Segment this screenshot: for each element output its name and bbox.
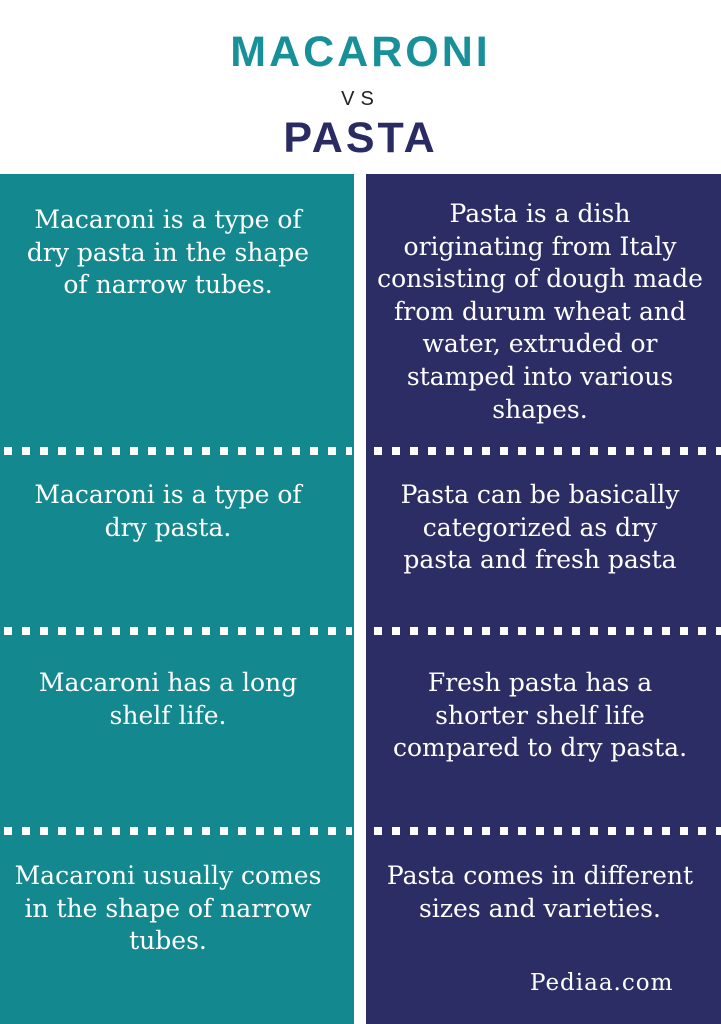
text: pasta shelf life: shorter shelf life: [435, 701, 645, 730]
text: macaroni definition: Macaroni is a type of: [34, 205, 302, 234]
text: pasta definition: [377, 199, 703, 424]
text: pasta type: categorized as dry: [423, 513, 657, 542]
text: pasta definition: consisting of dough made: [377, 264, 703, 293]
text: pasta definition: stamped into various: [407, 362, 673, 391]
text: pasta shape: sizes and varieties.: [419, 894, 661, 923]
text: pasta definition: from durum wheat and: [394, 297, 686, 326]
text: macaroni shelf life: shelf life.: [110, 701, 226, 730]
title: pasta: PASTA: [283, 114, 438, 162]
text: pasta definition: water, extruded or: [422, 329, 658, 358]
text: macaroni shape: in the shape of narrow: [24, 894, 312, 923]
text: macaroni definition: dry pasta in the shape: [27, 238, 309, 267]
text: pasta definition: originating from Italy: [404, 232, 676, 261]
text: macaroni shelf life: Macaroni has a long: [39, 668, 297, 697]
text: pasta shape: Pasta comes in different: [387, 861, 693, 890]
text: macaroni type: dry pasta.: [105, 513, 231, 542]
text: macaroni definition: of narrow tubes.: [63, 270, 273, 299]
text: pasta type: Pasta can be basically: [401, 480, 679, 509]
text: macaroni shape: Macaroni usually comes: [15, 861, 321, 890]
panel: pasta column: [366, 174, 721, 1024]
text: macaroni type: [34, 480, 304, 542]
vs: VS: [341, 88, 380, 110]
text: pasta shelf life: Fresh pasta has a: [428, 668, 652, 697]
text: pasta shelf life: [393, 668, 687, 762]
text: macaroni definition: [27, 205, 309, 299]
text: macaroni shelf life: [39, 668, 297, 730]
text: pasta definition: shapes.: [492, 395, 588, 424]
text: macaroni shape: tubes.: [129, 926, 207, 955]
text: pasta shape: [387, 861, 693, 923]
text: pasta shelf life: compared to dry pasta.: [393, 733, 687, 762]
logo: pediaa.com: Pediaa.com: [530, 970, 673, 996]
panel: macaroni column: [0, 174, 354, 1024]
text: pasta type: pasta and fresh pasta: [403, 545, 677, 574]
title: macaroni: MACARONI: [230, 28, 491, 76]
text: pasta definition: Pasta is a dish: [450, 199, 630, 228]
text: macaroni type: Macaroni is a type of: [34, 480, 302, 509]
text: macaroni shape: [15, 861, 321, 955]
text: pasta type: [401, 480, 680, 574]
